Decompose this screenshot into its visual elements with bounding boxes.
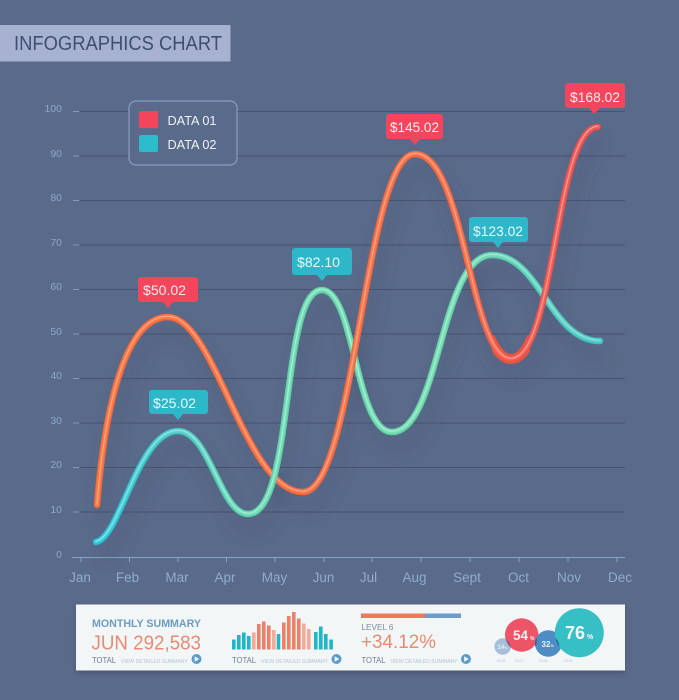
bubble chart: 54 [513,627,528,643]
bubble chart: % [530,636,535,642]
y axis labels: 50 [50,326,62,338]
x axis: Mar [165,570,189,585]
line: data 01 [97,126,598,505]
y axis labels: 60 [50,281,62,293]
x axis: Apr [214,570,236,585]
bubble chart: 14% [498,645,508,651]
y axis labels: 10 [50,504,62,516]
bubble chart: 2017 [515,658,524,663]
x axis: Jan [69,570,91,585]
bubble chart: % [587,634,594,641]
bubble chart: 32% [542,640,554,649]
line: data 02 [96,254,600,542]
x axis: Aug [402,570,427,585]
monthly summary block: MONTHLY SUMMARY [92,618,202,630]
title [0,25,230,62]
mini bar chart: TOTAL [232,656,257,665]
x axis: Dec [608,570,632,585]
y axis labels: 30 [50,415,62,427]
x axis [69,557,632,585]
mini bar chart [232,612,342,665]
y axis labels: 90 [50,148,62,160]
y axis labels: 70 [50,237,62,249]
y axis labels: 0 [56,549,62,561]
x axis: Jul [360,570,377,585]
x axis: Oct [508,570,529,585]
curve shadows [101,143,605,558]
bubble chart: 76 [565,623,585,643]
level block [361,614,471,665]
x axis: Sept [453,570,481,585]
bubble chart: 2019 [564,658,573,663]
monthly summary block [92,618,202,665]
y axis labels: 100 [44,103,62,115]
bubble chart [494,608,604,663]
bubble chart: 2018 [539,658,548,663]
y axis labels: 40 [50,370,62,382]
level block: TOTAL [362,656,386,665]
title: INFOGRAPHICS CHART [14,33,222,55]
level block: VIEW DETAILED SUMMARY [390,659,458,665]
callout: $25.02 [149,390,208,420]
callout: $25.02: $25.02 [153,395,196,411]
callout: $82.10 [292,248,352,281]
monthly summary block: JUN 292,583 [92,632,201,654]
callout: $123.02 [469,217,528,248]
callout: $145.02 [386,114,443,145]
monthly summary block: VIEW DETAILED SUMMARY [121,659,189,665]
monthly summary block: TOTAL [92,656,117,665]
legend [129,101,237,165]
x axis: Nov [557,570,581,585]
callout: $50.02 [138,277,198,308]
x axis: May [262,570,287,585]
callout: $168.02: $168.02 [570,89,620,105]
summary panel [76,604,625,673]
x axis: Jun [313,570,334,585]
mini bar chart: VIEW DETAILED SUMMARY [261,659,329,665]
level block: +34.12% [361,632,436,653]
line: data 02 May crossing overlay [266,458,282,498]
callout: $168.02 [565,83,625,114]
y axis labels [44,103,62,561]
level block: LEVEL 6 [362,622,394,632]
bubble chart: 2016 [497,658,506,663]
x axis: Feb [116,570,139,585]
legend item: data 02: DATA 02 [168,137,216,152]
y axis labels: 80 [50,192,62,204]
legend item: data 01: DATA 01 [168,113,216,128]
callout: $82.10: $82.10 [297,254,340,270]
callout: $145.02: $145.02 [390,119,439,135]
callout: $123.02: $123.02 [473,223,523,239]
callout: $50.02: $50.02 [143,282,186,298]
y axis labels: 20 [50,459,62,471]
